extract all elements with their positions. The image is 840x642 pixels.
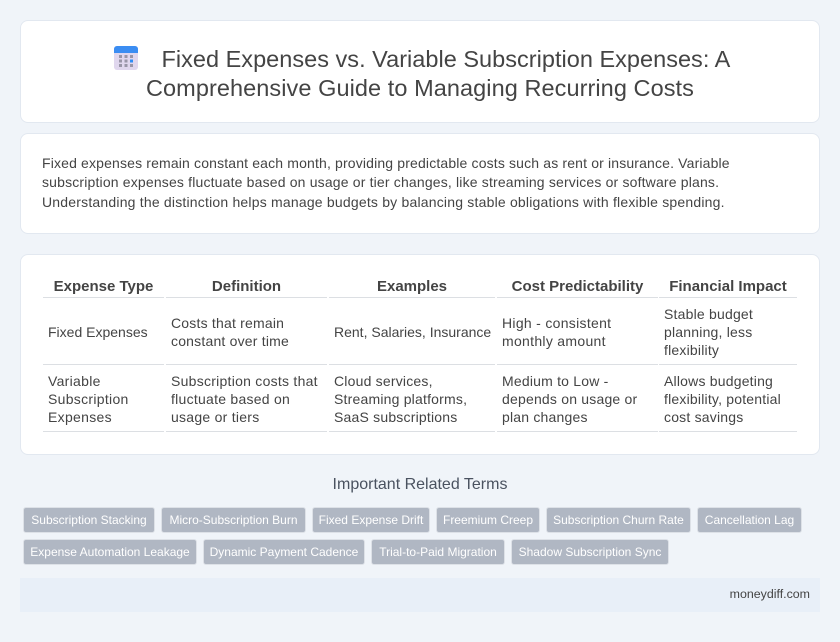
row 2: examples: SaaS subscriptions <box>334 409 457 425</box>
row 2: Variable Subscription Expenses: Expenses <box>48 409 112 425</box>
row 2: examples <box>334 373 467 425</box>
tag: Fixed Expense Drift <box>319 513 423 527</box>
tag: Cancellation Lag <box>705 513 794 527</box>
footer bar <box>20 578 820 612</box>
row 1: definition <box>171 315 289 349</box>
intro panel <box>20 133 820 234</box>
icon: calendar <box>114 46 138 70</box>
tag: Dynamic Payment Cadence <box>210 545 358 559</box>
row 2: definition: Subscription costs that <box>171 373 318 389</box>
tag <box>161 507 306 533</box>
header: Definition: Definition <box>212 278 281 295</box>
title: Comprehensive Guide to Managing Recurring Costs <box>146 75 694 101</box>
row 2: definition: usage or tiers <box>171 409 259 425</box>
row 1: impact: Stable budget <box>664 306 753 322</box>
intro text <box>42 155 730 210</box>
intro text: subscription expenses fluctuate based on usage or tier changes, like streaming services or software plans. <box>42 174 719 190</box>
row 2: impact: Allows budgeting <box>664 373 773 389</box>
row 1: definition: constant over time <box>171 333 289 349</box>
header: Expense Type: Expense Type <box>54 278 153 295</box>
intro text: Understanding the distinction helps manage budgets by balancing stable obligations with flexible spending. <box>42 194 725 210</box>
row 1: definition: Costs that remain <box>171 315 284 331</box>
row 2: predictability <box>502 373 637 425</box>
title <box>146 46 730 101</box>
tag <box>546 507 691 533</box>
tag <box>203 539 365 565</box>
row 2: Variable Subscription Expenses <box>48 373 129 425</box>
row 1: predictability <box>502 315 611 349</box>
tag: Subscription Stacking <box>31 513 147 527</box>
row 2: impact: cost savings <box>664 409 743 425</box>
tag <box>23 507 155 533</box>
tag <box>371 539 505 565</box>
table panel <box>20 254 820 455</box>
row 2: predictability: plan changes <box>502 409 588 425</box>
tag <box>697 507 802 533</box>
tag: Subscription Churn Rate <box>553 513 684 527</box>
tag <box>312 507 430 533</box>
header: Cost Predictability: Cost Predictability <box>512 278 643 295</box>
row 1: examples: Rent, Salaries, Insurance <box>334 324 491 340</box>
row 1: impact: planning, less <box>664 324 752 340</box>
tag: Shadow Subscription Sync <box>519 545 661 559</box>
tag <box>511 539 669 565</box>
tag: Trial-to-Paid Migration <box>379 545 497 559</box>
row 2: definition: fluctuate based on <box>171 391 290 407</box>
row 1: Fixed Expenses: Fixed Expenses <box>48 324 148 340</box>
tag <box>23 539 197 565</box>
footer source: moneydiff.com <box>730 587 810 601</box>
row 1: impact <box>664 306 753 358</box>
tag: Micro-Subscription Burn <box>169 513 298 527</box>
header panel <box>20 20 820 123</box>
row 2: Variable Subscription Expenses: Subscription <box>48 391 129 407</box>
row 1: predictability: monthly amount <box>502 333 606 349</box>
tag: Freemium Creep <box>443 513 533 527</box>
header: Examples: Examples <box>377 278 447 295</box>
row 1: predictability: High - consistent <box>502 315 611 331</box>
intro text: Fixed expenses remain constant each month, providing predictable costs such as rent or insurance. Variable <box>42 155 730 171</box>
title: Fixed Expenses vs. Variable Subscription Expenses: A <box>162 46 730 72</box>
row 2: Variable Subscription Expenses: Variable <box>48 373 101 389</box>
row 2: examples: Streaming platforms, <box>334 391 467 407</box>
tag: Expense Automation Leakage <box>30 545 190 559</box>
row 2: impact: flexibility, potential <box>664 391 781 407</box>
related terms heading: Important Related Terms <box>333 476 507 493</box>
row 2: impact <box>664 373 781 425</box>
tag <box>436 507 540 533</box>
row 1: impact: flexibility <box>664 342 719 358</box>
row 2: predictability: Medium to Low - <box>502 373 608 389</box>
header: Financial Impact: Financial Impact <box>669 278 787 295</box>
row 2: predictability: depends on usage or <box>502 391 637 407</box>
row 2: definition <box>171 373 318 425</box>
row 2: examples: Cloud services, <box>334 373 433 389</box>
